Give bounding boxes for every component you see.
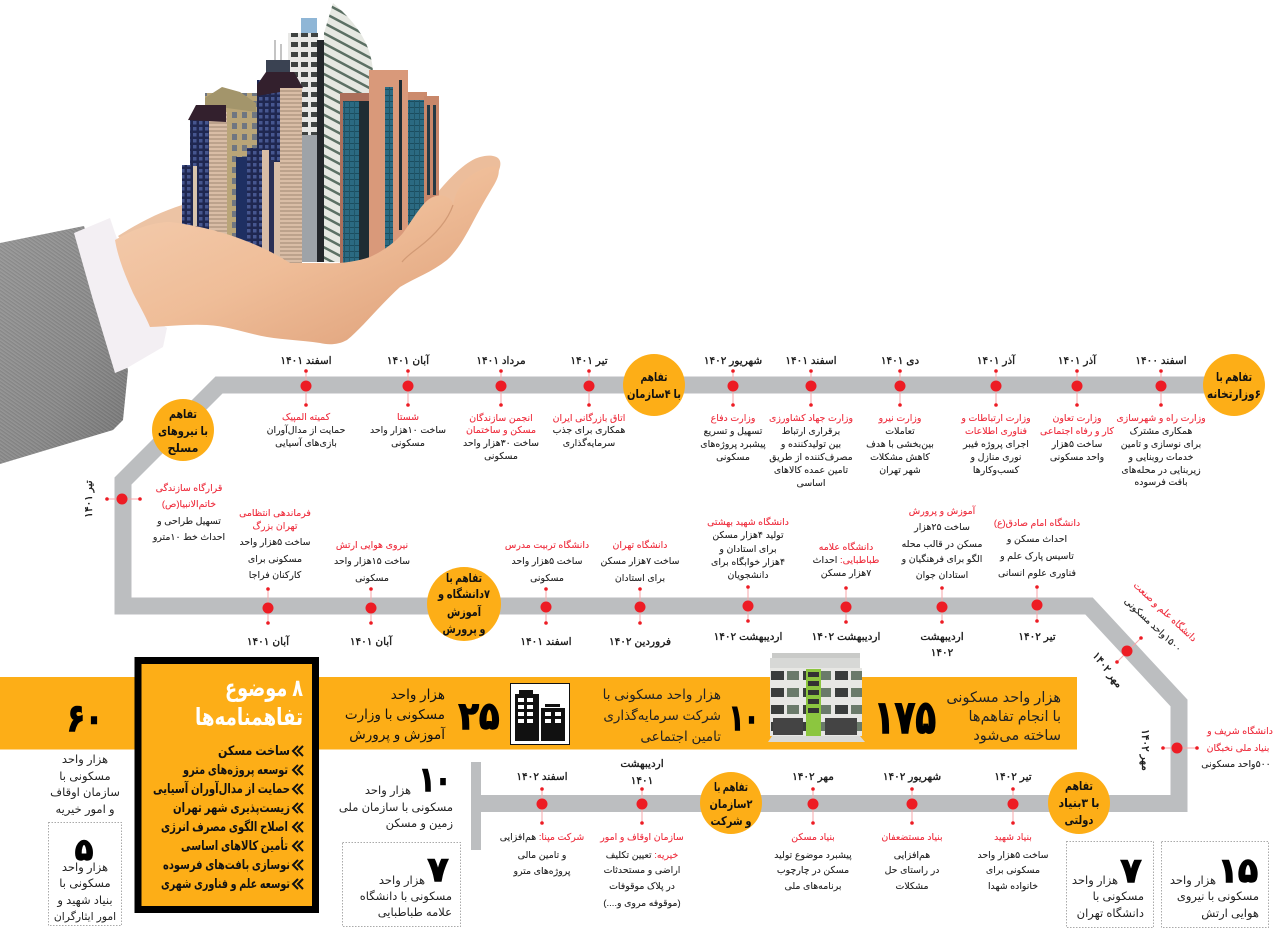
- milestone: بنیاد شهید: بنیاد شهید: [994, 831, 1032, 842]
- milestone: علامه طباطبایی: دانشگاه علامه: [819, 541, 873, 552]
- milestone: شهید بهشتی: برای استادان و: [718, 543, 777, 554]
- milestone: دانشگاه تهران: [601, 539, 680, 648]
- box: ۵ هزار بنیاد شهید: بنیاد شهید و: [56, 895, 113, 908]
- circle: ۴ سازمان: تفاهم: [640, 370, 668, 384]
- milestone: وزارت راه و شهرسازی: همکاری مشترک: [1130, 425, 1192, 436]
- box: ۱۵ هزار نیروی هوایی: [1162, 842, 1268, 928]
- note: ۶۰ هزار اوقاف: [50, 754, 120, 817]
- topic list: توسعه علم و فناوری شهری: [161, 876, 290, 891]
- milestone: تربیت مدرس: [505, 539, 589, 648]
- circle: ۷ دانشگاه: آموزش: [447, 604, 482, 620]
- milestone: آموزش و پرورش: آموزش و پرورش: [909, 505, 976, 516]
- left side milestone: قرارگاه خاتم: تسهیل طراحی و: [156, 515, 221, 526]
- milestone: بنیاد مسکن: [774, 771, 852, 891]
- milestone: وزارت ارتباطات: فناوری اطلاعات: [965, 425, 1027, 436]
- stat: ۱۷۵ هزار: هزار واحد مسکونی: [946, 690, 1061, 706]
- milestone: کمیته المپیک: حمایت از مدال‌آوران: [267, 424, 346, 435]
- back of palm: [118, 205, 190, 250]
- milestone: وزارت جهاد کشاورزی: اساسی: [796, 477, 826, 488]
- topic list: [153, 743, 303, 891]
- milestone: وزارت جهاد کشاورزی: [769, 355, 853, 488]
- milestone: وزارت دفاع: مسکونی: [716, 451, 750, 462]
- top row milestones: [267, 354, 1206, 488]
- milestone: شستا: [370, 354, 446, 448]
- note: ۱۰ هزار زمین و مسکن: هزار واحد: [365, 785, 411, 798]
- box: ۵ هزار بنیاد شهید: [48, 822, 122, 926]
- box: ۷ هزار دانشگاه تهران: دانشگاه تهران: [1077, 906, 1144, 921]
- milestone: وزارت نیرو: بین‌بخشی با هدف: [866, 438, 934, 449]
- milestone: شرکت مپنا: و تامین مالی: [518, 849, 566, 860]
- circle: نیروهای مسلح: با نیروهای: [158, 424, 208, 439]
- milestone: نیروی هوایی: ساخت ۱۵هزار واحد: [334, 555, 410, 566]
- note: ۱۰ هزار زمین و مسکن: مسکونی با سازمان ملی: [339, 802, 453, 815]
- topic list: نوسازی بافت‌های فرسوده: [163, 857, 290, 872]
- milestone: سازمان اوقاف: (موقوفه مروی و....): [603, 897, 681, 908]
- stat: ۱۷۵ هزار: ساخته می‌شود: [973, 728, 1061, 744]
- panel heading: تفاهمنامه‌ها: [195, 704, 303, 731]
- milestone: وزارت نیرو: دی ۱۴۰۱: [881, 355, 920, 367]
- milestone: اتاق بازرگانی: اتاق بازرگانی ایران: [553, 412, 625, 423]
- stat: ۲۵ هزار آموزش و پرورش: هزار واحد: [391, 687, 445, 703]
- milestone: آموزش و پرورش: الگو برای فرهنگیان و: [901, 553, 982, 564]
- milestone: وزارت ارتباطات: کسب‌وکارها: [973, 464, 1020, 475]
- milestone: وزارت ارتباطات: اجرای پروژه فیبر: [962, 438, 1029, 449]
- stat: ۱۰ هزار تامین اجتماعی: [603, 687, 759, 745]
- milestone: سازمان اوقاف: خیریه: تعیین تکلیف: [606, 849, 678, 860]
- milestone: انجمن سازندگان: انجمن سازندگان: [469, 412, 533, 423]
- milestone: فرماندهی انتظامی: ساخت ۵هزار واحد: [239, 536, 311, 547]
- note: ۶۰ هزار اوقاف: سازمان اوقاف: [50, 787, 120, 800]
- stat: ۶۰: ۶۰: [67, 698, 103, 740]
- milestone: وزارت نیرو: تعاملات: [885, 425, 915, 436]
- hand holding buildings: [0, 3, 500, 464]
- panel heading: [195, 675, 303, 731]
- topic list: ساخت مسکن: [218, 743, 290, 758]
- left side milestone: قرارگاه خاتم: تیر ۱۴۰۱: [83, 480, 95, 518]
- circle: ۲ سازمان و شرکت: و شرکت: [710, 814, 752, 829]
- box: ۵ هزار بنیاد شهید: ۵: [75, 834, 93, 867]
- stat: ۱۷۵ هزار: با انجام تفاهم‌ها: [969, 709, 1061, 725]
- milestone: وزارت تعاون: وزارت تعاون: [1052, 412, 1102, 423]
- topic list: اصلاح الگوی مصرف انرژی: [161, 819, 288, 834]
- milestone: انجمن سازندگان: ساخت ۳۰هزار واحد: [463, 437, 539, 448]
- milestone: آموزش و پرورش: [901, 505, 982, 659]
- right side milestone: شریف و نخبگان: [1139, 725, 1273, 771]
- box: ۷ هزار دانشگاه تهران: ۷: [1121, 852, 1142, 890]
- milestone: اتاق بازرگانی: همکاری برای جذب: [553, 424, 625, 435]
- milestone: وزارت دفاع: وزارت دفاع: [711, 412, 755, 423]
- milestone: علامه طباطبایی: [812, 541, 880, 643]
- milestone: امام صادق: تیر ۱۴۰۲: [1018, 631, 1056, 643]
- box: ۵ هزار بنیاد شهید: امور ایثارگران: [54, 910, 116, 923]
- milestone: بنیاد مستضعفان: در راستای حل: [885, 864, 939, 875]
- milestone: شهید بهشتی: دانشگاه شهید بهشتی: [707, 516, 789, 527]
- circle: ۳ بنیاد: دولتی: [1064, 813, 1094, 828]
- milestone: آموزش و پرورش: مسکن در قالب محله: [902, 538, 982, 549]
- milestone: نیروی هوایی: نیروی هوایی ارتش: [336, 539, 408, 550]
- milestone: وزارت راه و شهرسازی: اسفند ۱۴۰۰: [1135, 355, 1187, 367]
- milestone: وزارت راه و شهرسازی: برای نوسازی و تامین: [1121, 438, 1201, 449]
- milestone: شهید بهشتی: دانشجویان: [728, 569, 768, 580]
- milestone: وزارت دفاع: تسهیل و تسریع: [704, 425, 763, 436]
- milestone: اتاق بازرگانی: تیر ۱۴۰۱: [570, 355, 608, 367]
- milestone: علامه طباطبایی: طباطبایی: احداث: [813, 554, 879, 565]
- stat: ۲۵ هزار آموزش و پرورش: آموزش و پرورش: [349, 726, 446, 743]
- box: ۵ هزار بنیاد شهید: هزار واحد: [62, 862, 108, 875]
- milestone: وزارت راه و شهرسازی: وزارت راه و شهرسازی: [1116, 412, 1206, 423]
- milestone: انجمن سازندگان: مسکونی: [484, 450, 518, 461]
- milestone: وزارت ارتباطات: آذر ۱۴۰۱: [977, 354, 1016, 367]
- left side milestone: قرارگاه خاتم: خاتم‌الانبیا(ص): [162, 498, 216, 510]
- milestone: فرماندهی انتظامی: فرماندهی انتظامی: [239, 507, 311, 518]
- box: ۱۵ هزار نیروی هوایی: هوایی ارتش: [1201, 908, 1259, 921]
- milestone: شهید بهشتی: اردیبهشت ۱۴۰۲: [714, 631, 782, 643]
- milestone: دانشگاه تهران: ساخت ۷هزار مسکن: [601, 555, 680, 566]
- milestone: وزارت ارتباطات: [960, 354, 1031, 475]
- milestone: کمیته المپیک: [267, 355, 346, 448]
- topic list: حمایت از مدال‌آوران آسیایی: [153, 780, 290, 796]
- circle: نیروهای مسلح: مسلح: [168, 441, 198, 455]
- finger crease: [402, 205, 453, 262]
- stat: ۱۰ هزار تامین اجتماعی: ۱۰: [729, 697, 759, 738]
- stat: ۱۷۵ هزار: ۱۷۵: [874, 691, 936, 743]
- milestone: شستا: آبان ۱۴۰۱: [387, 354, 430, 367]
- box: ۷ هزار علامه طباطبایی: علامه طباطبایی: [378, 907, 452, 919]
- milestone: شهید بهشتی: [707, 516, 789, 643]
- milestone: بنیاد شهید: تیر ۱۴۰۲: [994, 771, 1032, 783]
- box: ۱۵ هزار نیروی هوایی: مسکونی با نیروی: [1177, 891, 1259, 904]
- milestone: بنیاد شهید: مسکونی برای: [986, 864, 1040, 875]
- milestone: وزارت نیرو: وزارت نیرو: [878, 412, 921, 423]
- milestone: سازمان اوقاف: در پلاک موقوفات: [609, 880, 675, 891]
- milestone: سازمان اوقاف: اراضی و مستحدثات: [604, 864, 680, 875]
- milestone: دانشگاه تهران: فروردین ۱۴۰۲: [609, 636, 671, 648]
- milestone: آموزش و پرورش: ساخت ۲۵هزار: [913, 521, 970, 532]
- milestone: وزارت تعاون: [1040, 354, 1114, 462]
- milestone: شرکت مپنا: [500, 771, 584, 876]
- milestone: دانشگاه تهران: برای استادان: [615, 572, 665, 583]
- topic list: توسعه پروژه‌های مترو: [182, 762, 288, 777]
- milestone: بنیاد مسکن: پیشبرد موضوع تولید: [774, 849, 852, 860]
- circle: ۲ سازمان و شرکت: [700, 772, 762, 834]
- stat: ۱۰ هزار تامین اجتماعی: تامین اجتماعی: [640, 729, 721, 745]
- milestone: وزارت راه و شهرسازی: [1116, 355, 1206, 487]
- milestone: وزارت جهاد کشاورزی: اسفند ۱۴۰۱: [785, 355, 837, 367]
- milestone: نیروی هوایی: [334, 539, 410, 648]
- milestone: بنیاد شهید: ساخت ۵هزار واحد: [977, 849, 1049, 860]
- icon: office buildings: [510, 684, 570, 744]
- milestone: بنیاد مستضعفان: هم‌افزایی: [894, 849, 930, 861]
- milestone: شستا: شستا: [397, 411, 419, 422]
- milestone: امام صادق: فناوری علوم انسانی: [998, 567, 1076, 578]
- box: ۷ هزار علامه طباطبایی: [342, 842, 460, 926]
- palm and fingers: [115, 166, 499, 344]
- milestone: سازمان اوقاف: اردیبهشت: [620, 758, 664, 770]
- right side milestone: شریف و نخبگان: دانشگاه شریف و: [1206, 725, 1273, 736]
- milestone: کمیته المپیک: بازی‌های آسیایی: [275, 437, 337, 448]
- milestone: شهید بهشتی: ۴هزار خوابگاه برای: [711, 556, 785, 567]
- milestone: امام صادق: احداث مسکن و: [1006, 533, 1067, 544]
- circle: ۷ دانشگاه: ۷دانشگاه و: [437, 587, 491, 602]
- milestone: فرماندهی انتظامی: [239, 507, 311, 648]
- milestone: نیروی هوایی: مسکونی: [355, 572, 389, 583]
- milestone: علامه طباطبایی: ۷هزار مسکن: [821, 567, 871, 578]
- milestone: بنیاد مسکن: مهر ۱۴۰۲: [792, 771, 834, 783]
- box: ۵ هزار بنیاد شهید: مسکونی با: [59, 878, 111, 891]
- milestone: وزارت دفاع: شهریور ۱۴۰۲: [704, 355, 762, 367]
- stat: ۲۵ هزار آموزش و پرورش: مسکونی با وزارت: [345, 707, 445, 723]
- buildings: [182, 3, 439, 265]
- milestone: بنیاد مستضعفان: [881, 771, 943, 891]
- milestone: شهید بهشتی: تولید ۴هزار مسکن: [712, 529, 784, 540]
- left side milestone: قرارگاه خاتم: احداث خط ۱۰مترو: [152, 531, 225, 542]
- milestone: شستا: ساخت ۱۰هزار واحد: [370, 424, 446, 435]
- milestone: وزارت جهاد کشاورزی: بین تولیدکننده و: [780, 438, 841, 449]
- left side milestone: قرارگاه خاتم: قرارگاه سازندگی: [156, 482, 222, 493]
- milestone: وزارت تعاون: واحد مسکونی: [1050, 451, 1104, 462]
- box: ۱۵ هزار نیروی هوایی: هزار واحد: [1170, 875, 1216, 888]
- milestone: بنیاد مستضعفان: مشکلات: [896, 880, 928, 891]
- milestone: وزارت جهاد کشاورزی: برقراری ارتباط: [782, 425, 840, 436]
- milestone: وزارت تعاون: کار و رفاه اجتماعی: [1040, 425, 1114, 436]
- milestone: اتاق بازرگانی: سرمایه‌گذاری: [563, 437, 615, 448]
- diagonal milestone: علم و صنعت: [1090, 579, 1199, 690]
- stat: ۲۵ هزار آموزش و پرورش: [345, 687, 500, 743]
- left side milestone: قرارگاه خاتم: [83, 480, 225, 542]
- box: ۷ هزار دانشگاه تهران: مسکونی با: [1093, 891, 1144, 904]
- track end bar: [471, 762, 481, 850]
- note: ۶۰ هزار اوقاف: و امور خیریه: [55, 804, 115, 817]
- milestone: آموزش و پرورش: استادان جوان: [916, 569, 968, 580]
- milestone: کمیته المپیک: اسفند ۱۴۰۱: [280, 355, 332, 367]
- box: ۷ هزار علامه طباطبایی: هزار واحد: [379, 875, 425, 888]
- circle: ۶ وزارتخانه: [1203, 354, 1265, 416]
- milestone: امام صادق: دانشگاه امام صادق(ع): [994, 517, 1080, 528]
- milestone: وزارت نیرو: کاهش مشکلات: [870, 451, 930, 462]
- milestone: آموزش و پرورش: اردیبهشت: [920, 631, 964, 643]
- milestone: نیروی هوایی: آبان ۱۴۰۱: [350, 635, 393, 648]
- milestone: وزارت دفاع: [700, 355, 766, 462]
- circle: نیروهای مسلح: تفاهم: [169, 407, 197, 421]
- milestone: بنیاد مستضعفان: بنیاد مستضعفان: [881, 831, 943, 842]
- bottom row milestones: [500, 758, 1049, 908]
- milestone: بنیاد شهید: [977, 771, 1049, 891]
- milestone: وزارت جهاد کشاورزی: تامین عمده کالاهای: [774, 464, 849, 475]
- stat: ۲۵ هزار آموزش و پرورش: ۲۵: [458, 696, 500, 738]
- diagonal milestone: علم و صنعت: ۱۵۰۰واحد مسکونی: [1122, 595, 1184, 654]
- milestone: انجمن سازندگان: [463, 355, 539, 461]
- milestone: شرکت مپنا: شرکت مپنا: هم‌افزایی: [500, 831, 584, 843]
- diagonal milestone: علم و صنعت: دانشگاه علم و صنعت: [1131, 579, 1199, 644]
- yellow stats band: [0, 653, 1077, 750]
- milestone: بنیاد مسکن: برنامه‌های ملی: [785, 880, 841, 891]
- topic list: زیست‌پذیری شهر تهران: [173, 800, 290, 815]
- back fingers: [430, 156, 500, 235]
- note: ۶۰ هزار اوقاف: مسکونی با: [59, 771, 111, 784]
- stat: ۱۷۵ هزار: [874, 690, 1061, 744]
- stat: ۱۰ هزار تامین اجتماعی: شرکت سرمایه‌گذاری: [603, 707, 721, 724]
- circle: ۴ سازمان: [623, 354, 685, 416]
- note: ۱۰ هزار زمین و مسکن: زمین و مسکن: [386, 818, 453, 831]
- milestone: تربیت مدرس: مسکونی: [530, 572, 564, 583]
- milestone: بنیاد مستضعفان: شهریور ۱۴۰۲: [883, 771, 941, 783]
- milestone: وزارت نیرو: [866, 355, 934, 475]
- milestone: وزارت راه و شهرسازی: خدمات روبنایی و: [1128, 451, 1194, 462]
- topics panel: [138, 660, 316, 910]
- milestone: فرماندهی انتظامی: مسکونی برای: [248, 553, 302, 564]
- circle: ۲ سازمان و شرکت: تفاهم با: [714, 780, 748, 794]
- icon: apartment building: [768, 653, 865, 742]
- milestone: وزارت جهاد کشاورزی: وزارت جهاد کشاورزی: [769, 412, 853, 423]
- right side milestone: شریف و نخبگان: بنیاد ملی نخبگان: [1207, 742, 1269, 753]
- circle: ۳ بنیاد: با ۳بنیاد: [1058, 796, 1100, 810]
- topic list: تأمین کالاهای اساسی: [181, 837, 288, 853]
- circle: ۷ دانشگاه: تفاهم با: [446, 571, 482, 585]
- middle row milestones: [239, 505, 1080, 659]
- milestone: وزارت تعاون: آذر ۱۴۰۱: [1058, 354, 1097, 367]
- circle: نیروهای مسلح: [152, 399, 214, 461]
- circle: ۶ وزارتخانه: ۶وزارتخانه: [1207, 387, 1261, 402]
- milestone: سازمان اوقاف: [599, 758, 684, 908]
- note: ۱۰ هزار زمین و مسکن: ۱۰: [419, 761, 451, 799]
- milestone: انجمن سازندگان: مرداد ۱۴۰۱: [476, 355, 526, 367]
- circle: ۷ دانشگاه: [427, 567, 501, 641]
- shirt cuff: [74, 218, 167, 373]
- stat: ۱۰ هزار تامین اجتماعی: هزار واحد مسکونی با: [603, 687, 721, 703]
- circle: ۲ سازمان و شرکت: ۲سازمان: [710, 797, 753, 811]
- milestone: امام صادق: [994, 517, 1080, 643]
- milestone: وزارت ارتباطات: وزارت ارتباطات و: [960, 412, 1031, 423]
- milestone: تربیت مدرس: دانشگاه تربیت مدرس: [505, 539, 589, 550]
- milestone: بنیاد مسکن: بنیاد مسکن: [791, 831, 835, 842]
- milestone: فرماندهی انتظامی: آبان ۱۴۰۱: [247, 635, 290, 648]
- milestone: شرکت مپنا: پروژه‌های مترو: [512, 865, 571, 876]
- right side milestone: شریف و نخبگان: ۵۰۰واحد مسکونی: [1201, 758, 1271, 769]
- diagonal milestone: علم و صنعت: مهر ۱۴۰۲: [1090, 650, 1125, 690]
- circle: ۷ دانشگاه: و پرورش: [442, 622, 486, 637]
- milestone: وزارت ارتباطات: نوری منازل و: [969, 451, 1022, 462]
- panel heading: ۸ موضوع: [225, 675, 303, 702]
- milestone: تربیت مدرس: ساخت ۵هزار واحد: [511, 555, 583, 566]
- milestone: بنیاد شهید: خانواده شهدا: [988, 880, 1038, 891]
- milestone: شرکت مپنا: اسفند ۱۴۰۲: [516, 771, 568, 783]
- milestone: وزارت راه و شهرسازی: بافت فرسوده: [1134, 476, 1188, 487]
- circle: ۳ بنیاد: [1048, 772, 1110, 834]
- note: ۱۰ هزار زمین و مسکن: [339, 761, 453, 831]
- circle: ۳ بنیاد: تفاهم: [1065, 779, 1093, 793]
- milestone: تربیت مدرس: اسفند ۱۴۰۱: [520, 636, 572, 648]
- milestone: سازمان اوقاف: ۱۴۰۱: [631, 775, 653, 787]
- milestone: وزارت دفاع: پیشبرد پروژه‌های: [700, 438, 766, 449]
- timeline track: [123, 385, 1240, 850]
- milestone: کمیته المپیک: کمیته المپیک: [282, 411, 331, 422]
- box: ۷ هزار علامه طباطبایی: مسکونی با دانشگاه: [360, 889, 452, 904]
- milestone: علامه طباطبایی: اردیبهشت ۱۴۰۲: [812, 631, 880, 643]
- milestone: وزارت نیرو: شهر تهران: [879, 464, 921, 475]
- milestone: دانشگاه تهران: دانشگاه تهران: [613, 539, 667, 550]
- milestone: وزارت راه و شهرسازی: زیربنایی در محله‌های: [1121, 464, 1201, 475]
- milestone: شستا: مسکونی: [391, 437, 425, 448]
- circle: ۶ وزارتخانه: تفاهم با: [1216, 370, 1252, 384]
- milestone: فرماندهی انتظامی: کارکنان فراجا: [249, 569, 302, 580]
- yellow agreement circles: [152, 354, 1265, 834]
- milestone: بنیاد مسکن: مسکن در چارچوب: [777, 864, 849, 875]
- milestone: فرماندهی انتظامی: تهران بزرگ: [253, 519, 298, 531]
- milestone: امام صادق: تاسیس پارک علم و: [999, 550, 1074, 562]
- milestone: اتاق بازرگانی: [553, 355, 625, 448]
- milestone: سازمان اوقاف: سازمان اوقاف و امور: [599, 831, 684, 842]
- sleeve: [0, 226, 128, 464]
- milestone: آموزش و پرورش: ۱۴۰۲: [931, 647, 954, 659]
- box: ۷ هزار دانشگاه تهران: [1066, 842, 1154, 928]
- box: ۷ هزار دانشگاه تهران: هزار واحد: [1072, 875, 1118, 888]
- milestone: انجمن سازندگان: مسکن و ساختمان: [466, 424, 536, 435]
- note: ۶۰ هزار اوقاف: هزار واحد: [62, 754, 108, 767]
- box: ۱۵ هزار نیروی هوایی: ۱۵: [1218, 852, 1258, 890]
- right side milestone: شریف و نخبگان: مهر ۱۴۰۲: [1139, 729, 1151, 771]
- circle: ۴ سازمان: با ۴سازمان: [627, 387, 681, 401]
- milestone: وزارت جهاد کشاورزی: مصرف‌کننده از طریق: [769, 451, 853, 462]
- milestone: وزارت تعاون: ساخت ۵هزار: [1051, 438, 1102, 449]
- box: ۷ هزار علامه طباطبایی: ۷: [428, 851, 449, 889]
